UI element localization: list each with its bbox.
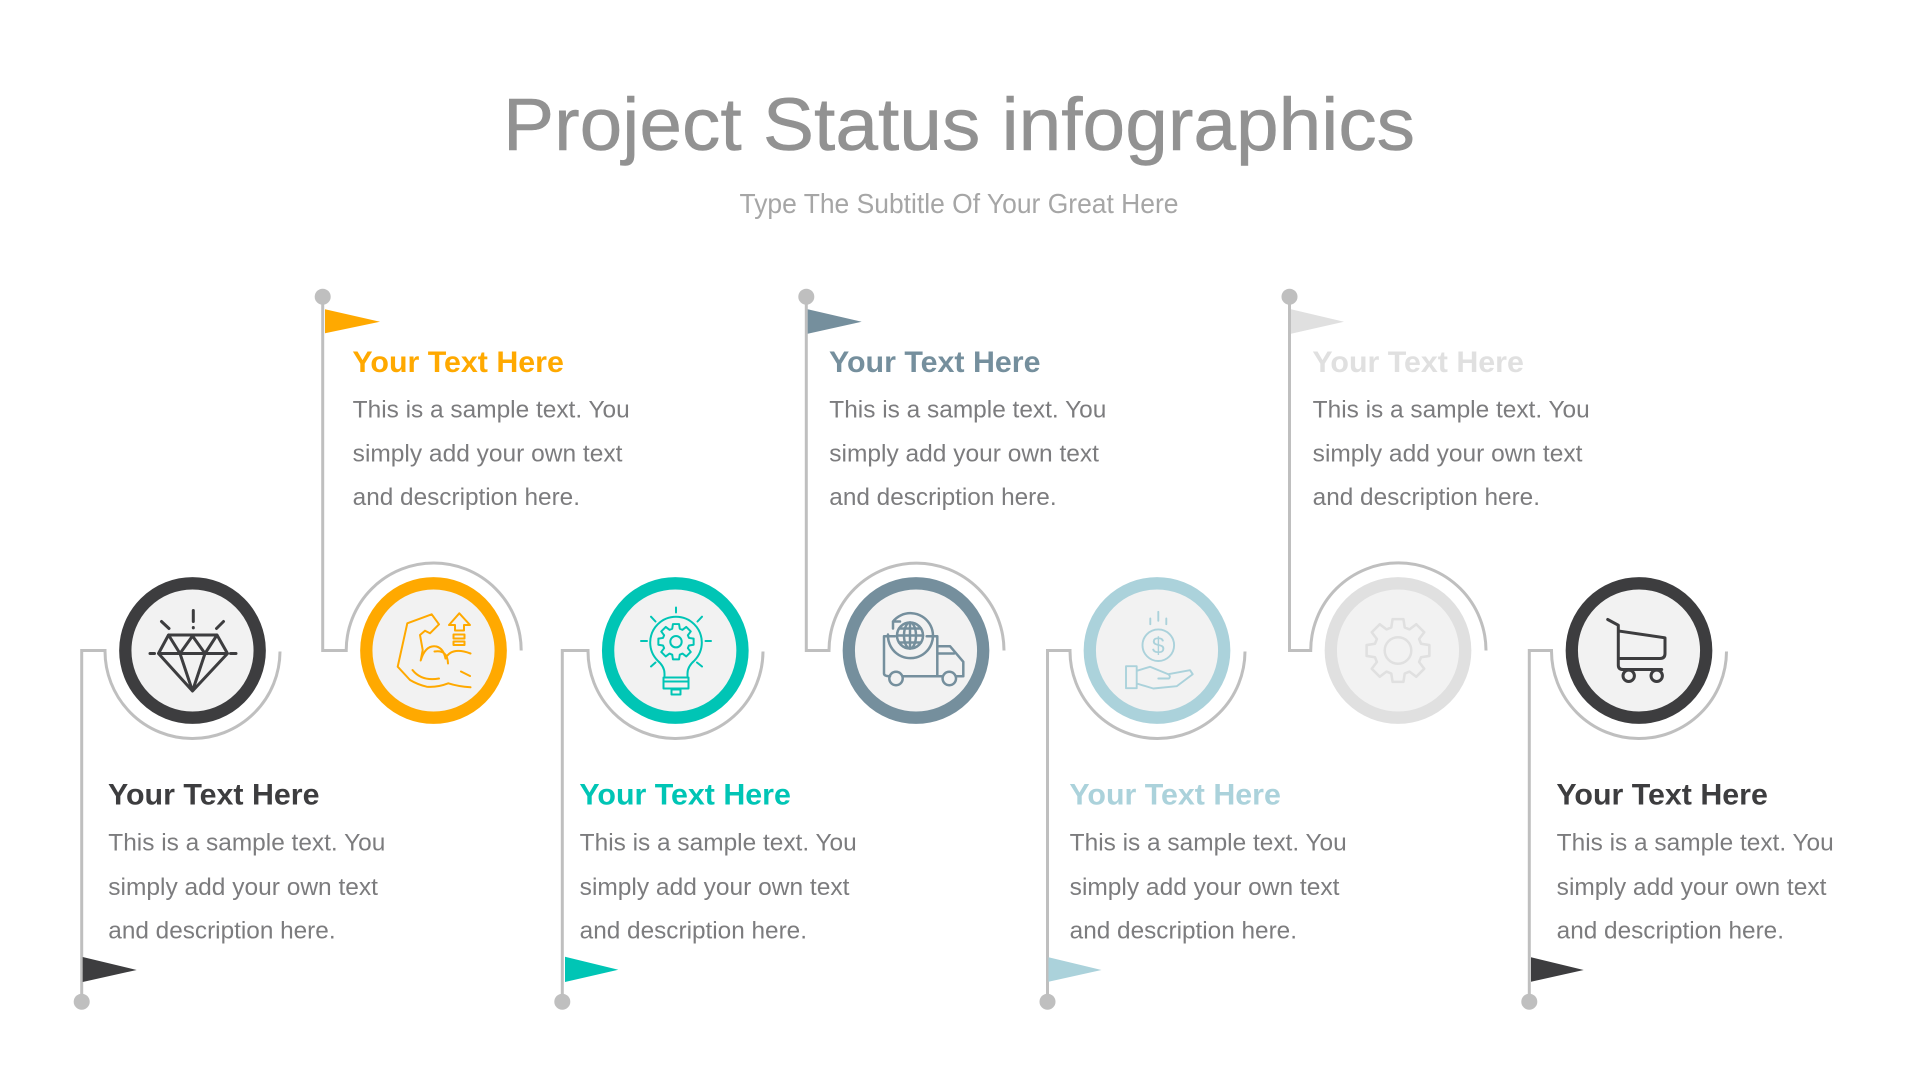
panel: item 5 hand with coin bbox=[1040, 583, 1347, 1010]
body text: This is a sample text. You bbox=[580, 830, 857, 857]
ring bbox=[125, 583, 260, 718]
body text: simply add your own text bbox=[580, 874, 850, 901]
body text: and description here. bbox=[108, 917, 336, 944]
body text: This is a sample text. You bbox=[108, 830, 385, 857]
body text bbox=[580, 830, 857, 944]
body text: This is a sample text. You bbox=[1313, 397, 1590, 424]
body text: and description here. bbox=[1070, 917, 1297, 944]
body text bbox=[108, 830, 385, 944]
body text: This is a sample text. You bbox=[1557, 830, 1834, 857]
ring bbox=[366, 583, 501, 718]
body text: This is a sample text. You bbox=[1070, 830, 1347, 857]
body text bbox=[1557, 830, 1834, 944]
heading: Your Text Here bbox=[1556, 779, 1768, 812]
connector dot bbox=[1040, 994, 1056, 1010]
body text: simply add your own text bbox=[1313, 441, 1583, 468]
heading: Your Text Here bbox=[1069, 779, 1281, 812]
body text: and description here. bbox=[829, 484, 1057, 511]
title: Project Status infographics bbox=[503, 83, 1415, 166]
connector dot bbox=[315, 289, 331, 305]
heading: Your Text Here bbox=[1312, 346, 1524, 379]
ring bbox=[849, 583, 983, 718]
icon: muscle bbox=[398, 613, 470, 687]
connector dot bbox=[554, 994, 570, 1010]
subtitle: Type The Subtitle Of Your Great Here bbox=[740, 188, 1178, 219]
flag bbox=[808, 309, 862, 334]
body text: and description here. bbox=[1313, 484, 1540, 511]
connector bbox=[323, 297, 521, 650]
body text: simply add your own text bbox=[108, 874, 378, 901]
body text bbox=[1313, 397, 1590, 511]
connector dot bbox=[1521, 994, 1537, 1010]
ring bbox=[608, 583, 742, 718]
panel: item 3 light bulb bbox=[554, 583, 857, 1010]
icon: shopping cart bbox=[1608, 620, 1665, 682]
icon: gear bbox=[1367, 619, 1429, 682]
body text: simply add your own text bbox=[1557, 874, 1827, 901]
flag bbox=[565, 957, 618, 982]
connector bbox=[562, 650, 763, 1002]
panel: item 1 diamond bbox=[74, 583, 385, 1010]
panel: item 6 gear bbox=[1282, 289, 1590, 718]
icon: hand with coin: $ bbox=[1152, 632, 1165, 658]
connector dot bbox=[798, 289, 814, 305]
body text: and description here. bbox=[580, 917, 807, 944]
body text bbox=[353, 397, 630, 511]
ring bbox=[1572, 583, 1706, 718]
connector bbox=[1048, 650, 1245, 1002]
flag bbox=[83, 957, 137, 982]
heading: Your Text Here bbox=[829, 346, 1040, 379]
body text: and description here. bbox=[353, 484, 580, 511]
heading: Your Text Here bbox=[579, 779, 791, 812]
icon: light bulb with gear bbox=[641, 608, 711, 694]
connector dot bbox=[1282, 289, 1298, 305]
icon: diamond bbox=[150, 610, 236, 691]
connector bbox=[1290, 297, 1486, 650]
body text: simply add your own text bbox=[1070, 874, 1340, 901]
ring bbox=[1090, 583, 1224, 718]
panel: item 4 delivery truck bbox=[798, 289, 1106, 718]
body text: This is a sample text. You bbox=[829, 397, 1106, 424]
connector dot bbox=[74, 994, 90, 1010]
connector bbox=[82, 650, 280, 1002]
connector bbox=[1529, 650, 1726, 1002]
flag bbox=[1048, 957, 1102, 982]
flag bbox=[1531, 957, 1584, 982]
heading: Your Text Here bbox=[108, 779, 320, 812]
connector bbox=[806, 297, 1004, 650]
heading: Your Text Here bbox=[352, 346, 564, 379]
panel: item 2 muscle bbox=[315, 289, 630, 718]
panel: item 7 shopping cart bbox=[1521, 583, 1834, 1010]
body text: and description here. bbox=[1557, 917, 1784, 944]
flag bbox=[325, 309, 380, 333]
icon: truck with globe bbox=[884, 613, 963, 685]
body text: simply add your own text bbox=[829, 441, 1099, 468]
body text: This is a sample text. You bbox=[353, 397, 630, 424]
body text: simply add your own text bbox=[353, 441, 623, 468]
body text bbox=[1070, 830, 1347, 944]
body text bbox=[829, 397, 1106, 511]
ring bbox=[1331, 583, 1465, 718]
flag bbox=[1291, 309, 1344, 334]
icon: hand with coin bbox=[1126, 612, 1193, 688]
